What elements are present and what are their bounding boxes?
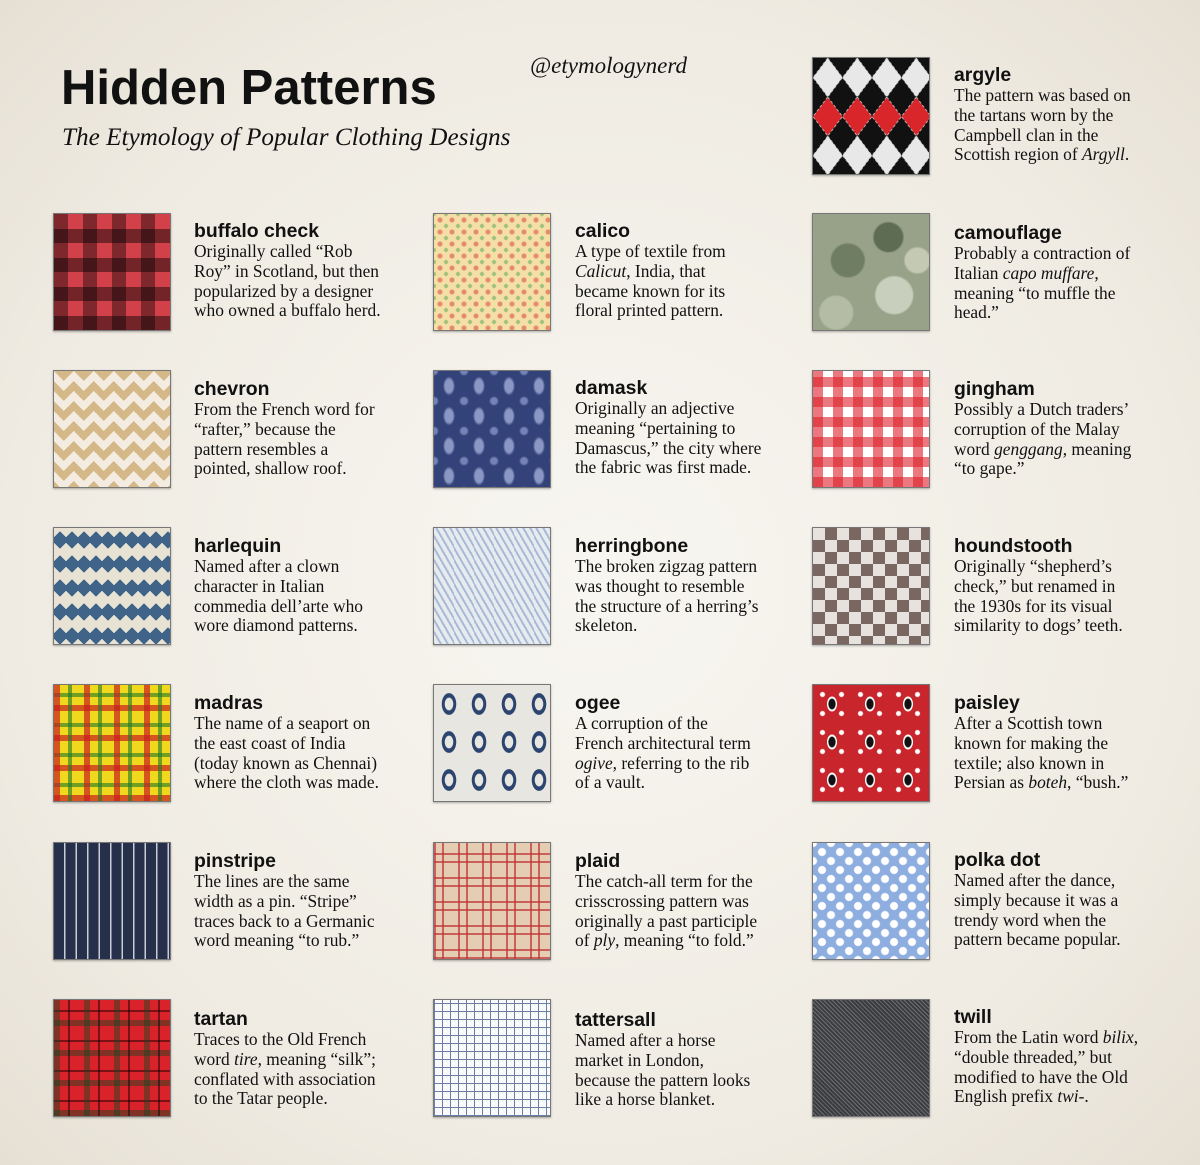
text: pinstripe: The lines are the same — [194, 871, 349, 891]
text: twill: twill — [954, 1006, 992, 1028]
text: tattersall: like a horse blanket. — [575, 1089, 715, 1109]
text: argyle: argyle — [954, 64, 1011, 86]
text: argyle: Campbell clan in the — [954, 125, 1098, 145]
text: polka dot: trendy word when the — [954, 910, 1106, 930]
title: Hidden Patterns — [61, 61, 437, 115]
text: harlequin: Named after a clown — [194, 556, 339, 576]
swatch: calico — [433, 213, 551, 331]
text: calico: Calicut, India, that — [575, 261, 705, 281]
text: herringbone: skeleton. — [575, 615, 637, 635]
swatch: gingham — [812, 370, 930, 488]
text: herringbone — [575, 535, 759, 635]
swatch: twill — [812, 999, 930, 1117]
text: harlequin: character in Italian — [194, 576, 324, 596]
text: damask: meaning “pertaining to — [575, 418, 735, 438]
text: gingham — [954, 378, 1131, 478]
text: twill: From the Latin word bilix, — [954, 1027, 1138, 1047]
text: gingham: “to gape.” — [954, 458, 1024, 478]
text: herringbone: The broken zigzag pattern — [575, 556, 757, 576]
text: calico — [575, 220, 726, 320]
text: houndstooth — [954, 535, 1123, 635]
text: herringbone: was thought to resemble — [575, 576, 745, 596]
swatch: damask — [433, 370, 551, 488]
text: madras: the east coast of India — [194, 733, 346, 753]
text: tartan — [194, 1008, 376, 1108]
text: tattersall: because the pattern looks — [575, 1070, 750, 1090]
swatch: tartan — [53, 999, 171, 1117]
swatch: paisley — [812, 684, 930, 802]
text: twill: modified to have the Old — [954, 1067, 1128, 1087]
text: ogee: A corruption of the — [575, 713, 708, 733]
text: damask — [575, 377, 761, 477]
text: camouflage: Italian capo muffare, — [954, 263, 1099, 283]
text: chevron — [194, 378, 375, 478]
text: harlequin: harlequin — [194, 535, 281, 557]
handle: @etymologynerd — [530, 53, 687, 78]
text: chevron: pattern resembles a — [194, 439, 328, 459]
swatch: ogee — [433, 684, 551, 802]
text: twill — [954, 1006, 1138, 1106]
text: madras: (today known as Chennai) — [194, 753, 377, 773]
text: argyle: The pattern was based on — [954, 85, 1131, 105]
text: damask: damask — [575, 377, 647, 399]
text: paisley: paisley — [954, 692, 1020, 714]
text: ogee: ogive, referring to the rib — [575, 753, 749, 773]
text: buffalo check: buffalo check — [194, 220, 319, 242]
text: plaid — [575, 850, 757, 950]
text: tattersall: Named after a horse — [575, 1030, 716, 1050]
text: plaid: originally a past participle — [575, 911, 757, 931]
text: ogee — [575, 692, 751, 792]
text: camouflage — [954, 222, 1130, 322]
text: gingham: gingham — [954, 378, 1035, 400]
text: madras: where the cloth was made. — [194, 772, 379, 792]
text: herringbone: the structure of a herring’s — [575, 596, 759, 616]
text: ogee: ogee — [575, 692, 620, 714]
text: chevron: From the French word for — [194, 399, 375, 419]
text: plaid: plaid — [575, 850, 620, 872]
text: chevron: pointed, shallow roof. — [194, 458, 347, 478]
text: pinstripe — [194, 850, 375, 950]
text: gingham: corruption of the Malay — [954, 419, 1120, 439]
text: harlequin: wore diamond patterns. — [194, 615, 358, 635]
text: gingham: Possibly a Dutch traders’ — [954, 399, 1129, 419]
text: houndstooth: the 1930s for its visual — [954, 596, 1112, 616]
text: paisley — [954, 692, 1128, 792]
text: chevron: chevron — [194, 378, 269, 400]
text: gingham: word genggang, meaning — [954, 439, 1131, 459]
text: plaid: crisscrossing pattern was — [575, 891, 749, 911]
text: harlequin — [194, 535, 363, 635]
text: paisley: textile; also known in — [954, 753, 1104, 773]
swatch: buffalo check — [53, 213, 171, 331]
swatch: plaid — [433, 842, 551, 960]
text: paisley: Persian as boteh, “bush.” — [954, 772, 1128, 792]
swatch: argyle — [812, 57, 930, 175]
text: polka dot: simply because it was a — [954, 890, 1118, 910]
text: houndstooth: check,” but renamed in — [954, 576, 1115, 596]
text: polka dot: Named after the dance, — [954, 870, 1115, 890]
text: damask: Damascus,” the city where — [575, 438, 761, 458]
swatch: polka dot — [812, 842, 930, 960]
text: calico: became known for its — [575, 281, 725, 301]
text: buffalo check: popularized by a designer — [194, 281, 373, 301]
text: calico: calico — [575, 220, 630, 242]
text: calico: A type of textile from — [575, 241, 726, 261]
text: tattersall: tattersall — [575, 1009, 656, 1031]
text: herringbone: herringbone — [575, 535, 688, 557]
swatch: pinstripe — [53, 842, 171, 960]
text: tartan: word tire, meaning “silk”; — [194, 1049, 376, 1069]
text: buffalo check: Roy” in Scotland, but then — [194, 261, 379, 281]
swatch: chevron — [53, 370, 171, 488]
text: damask: Originally an adjective — [575, 398, 734, 418]
text: polka dot: pattern became popular. — [954, 929, 1121, 949]
text: houndstooth: similarity to dogs’ teeth. — [954, 615, 1123, 635]
text: madras: The name of a seaport on — [194, 713, 370, 733]
text: argyle: Scottish region of Argyll. — [954, 144, 1129, 164]
text: tartan: conflated with association — [194, 1069, 376, 1089]
text: tattersall: market in London, — [575, 1050, 704, 1070]
text: houndstooth: houndstooth — [954, 535, 1072, 557]
swatch: camouflage — [812, 213, 930, 331]
text: plaid: The catch-all term for the — [575, 871, 753, 891]
text: camouflage: meaning “to muffle the — [954, 283, 1115, 303]
text: argyle: the tartans worn by the — [954, 105, 1113, 125]
text: buffalo check: Originally called “Rob — [194, 241, 352, 261]
text: polka dot: polka dot — [954, 849, 1040, 871]
text: buffalo check — [194, 220, 381, 320]
text: houndstooth: Originally “shepherd’s — [954, 556, 1112, 576]
text: damask: the fabric was first made. — [575, 457, 751, 477]
text: pinstripe: traces back to a Germanic — [194, 911, 375, 931]
text: twill: English prefix twi-. — [954, 1086, 1089, 1106]
text: pinstripe: pinstripe — [194, 850, 276, 872]
text: pinstripe: word meaning “to rub.” — [194, 930, 359, 950]
text: argyle — [954, 64, 1131, 164]
text: camouflage: Probably a contraction of — [954, 243, 1130, 263]
swatch: tattersall — [433, 999, 551, 1117]
text: paisley: After a Scottish town — [954, 713, 1102, 733]
text: paisley: known for making the — [954, 733, 1108, 753]
swatch: herringbone — [433, 527, 551, 645]
text: ogee: of a vault. — [575, 772, 645, 792]
text: tartan: to the Tatar people. — [194, 1088, 328, 1108]
text: camouflage: head.” — [954, 302, 999, 322]
text: pinstripe: width as a pin. “Stripe” — [194, 891, 357, 911]
text: tartan: Traces to the Old French — [194, 1029, 366, 1049]
swatch: harlequin — [53, 527, 171, 645]
text: tartan: tartan — [194, 1008, 248, 1030]
text: tattersall — [575, 1009, 750, 1109]
text: harlequin: commedia dell’arte who — [194, 596, 363, 616]
text: buffalo check: who owned a buffalo herd. — [194, 300, 381, 320]
text: calico: floral printed pattern. — [575, 300, 723, 320]
text: madras — [194, 692, 379, 792]
swatch: houndstooth — [812, 527, 930, 645]
text: ogee: French architectural term — [575, 733, 751, 753]
text: twill: “double threaded,” but — [954, 1047, 1112, 1067]
text: polka dot — [954, 849, 1121, 949]
subtitle: The Etymology of Popular Clothing Designs — [62, 124, 510, 151]
text: madras: madras — [194, 692, 263, 714]
swatch: madras — [53, 684, 171, 802]
text: camouflage: camouflage — [954, 222, 1062, 244]
text: chevron: “rafter,” because the — [194, 419, 336, 439]
text: plaid: of ply, meaning “to fold.” — [575, 930, 754, 950]
